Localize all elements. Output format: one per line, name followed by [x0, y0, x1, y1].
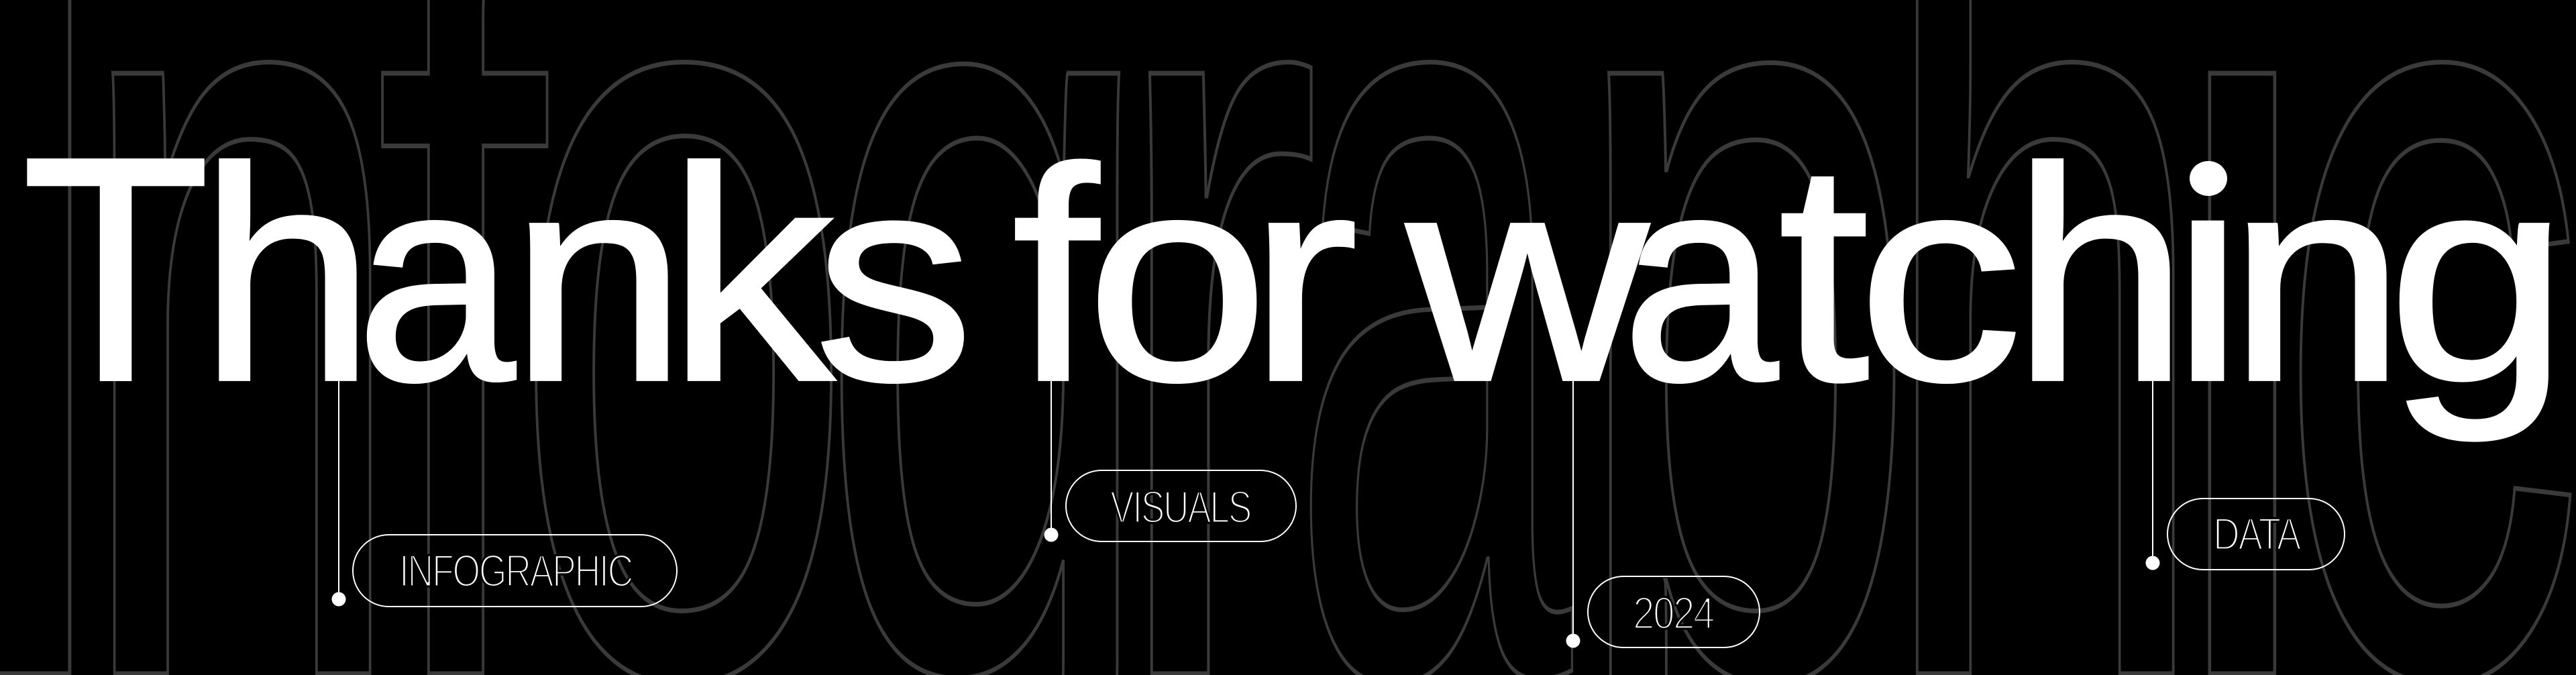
- title: Thanks for watching: k: [667, 105, 839, 444]
- tag: INFOGRAPHIC with connector: INFOGRAPHIC: [399, 546, 633, 596]
- title: Thanks for watching: T: [21, 91, 210, 447]
- tag: 2024 with connector: [1566, 381, 1760, 648]
- tag: VISUALS with connector: VISUALS: [1110, 482, 1250, 533]
- title: Thanks for watching: o: [1086, 115, 1269, 442]
- title: Thanks for watching: a: [356, 114, 517, 442]
- title: Thanks for watching: g: [2387, 114, 2569, 444]
- tag: DATA with connector: DATA: [2213, 509, 2302, 560]
- title: Thanks for watching: n: [2229, 114, 2406, 442]
- title: Thanks for watching: r: [1248, 114, 1358, 442]
- title: Thanks for watching: f: [1012, 105, 1099, 444]
- title: Thanks for watching: w: [1401, 115, 1652, 442]
- title: Thanks for watching: h: [199, 106, 376, 444]
- title: Thanks for watching: n: [510, 114, 687, 442]
- tag: VISUALS with connector: [1044, 381, 1296, 542]
- title: Thanks for watching: i: [2171, 111, 2245, 443]
- tag: DATA with connector: [2145, 381, 2345, 570]
- title: Thanks for watching: c: [1858, 114, 2023, 442]
- title: Thanks for watching: a: [1622, 114, 1780, 442]
- title: Thanks for watching: h: [2012, 106, 2189, 444]
- title: Thanks for watching: s: [814, 114, 974, 442]
- title: Thanks for watching: t: [1778, 97, 1870, 446]
- tag: 2024 with connector: 2024: [1633, 588, 1714, 639]
- title: Thanks for watching: [21, 91, 2569, 447]
- tag: INFOGRAPHIC with connector: [331, 381, 677, 607]
